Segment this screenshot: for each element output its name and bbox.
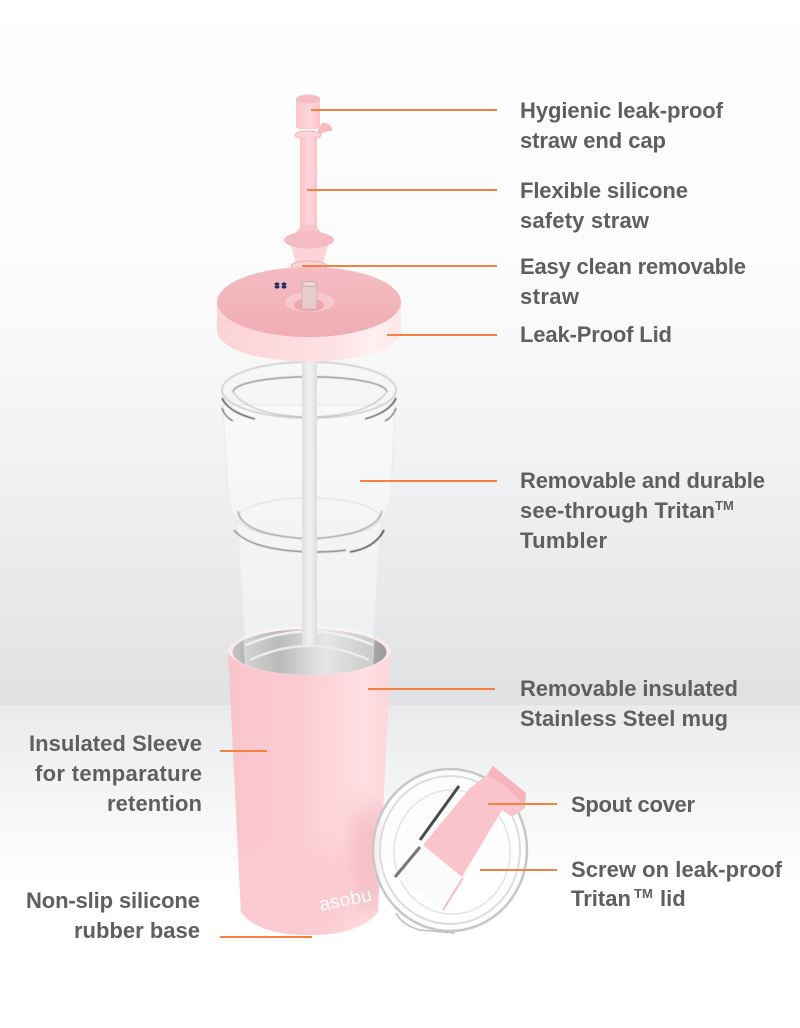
label: screw lid: TM xyxy=(634,886,653,901)
icon: small navy mark xyxy=(274,282,286,289)
label: base: rubber base xyxy=(74,918,200,943)
label: sleeve: retention xyxy=(107,791,202,816)
insulated sleeve xyxy=(225,652,391,940)
label: straw end cap: straw end cap xyxy=(520,128,666,153)
label: straw end cap: Hygienic leak-proof xyxy=(520,98,724,123)
label: removable straw: straw xyxy=(520,284,580,309)
label: base: Non-slip silicone xyxy=(26,888,200,913)
label: mug: Removable insulated xyxy=(520,676,738,701)
label: tumbler: TM xyxy=(715,498,734,513)
label: sleeve: Insulated Sleeve xyxy=(29,731,202,756)
clear straw xyxy=(302,355,317,645)
label: tumbler: Tumbler xyxy=(520,528,607,553)
label: removable straw: Easy clean removable xyxy=(520,254,746,279)
label: spout cover: Spout cover xyxy=(571,792,695,817)
label: tumbler: see-through Tritan xyxy=(520,498,715,523)
label: tumbler: Removable and durable xyxy=(520,468,765,493)
label: sleeve: for temparature xyxy=(35,761,202,786)
spout cover xyxy=(423,766,526,877)
screw-on lid xyxy=(373,766,527,933)
label: screw lid: Tritan xyxy=(571,886,631,911)
label: screw lid: Screw on leak-proof xyxy=(571,857,783,882)
label: mug: Stainless Steel mug xyxy=(520,706,728,731)
label: silicone straw: Flexible silicone xyxy=(520,178,688,203)
stainless steel mug: rim and interior xyxy=(228,626,392,678)
label: silicone straw: safety straw xyxy=(520,208,650,233)
leak-proof lid xyxy=(217,267,401,362)
brand logo: asobu xyxy=(318,885,374,916)
leader lines xyxy=(220,110,557,937)
label: lid: Leak-Proof Lid xyxy=(520,322,672,347)
label: screw lid: lid xyxy=(660,886,686,911)
tumbler: clear Tritan xyxy=(222,362,396,679)
pink straw xyxy=(284,94,334,271)
